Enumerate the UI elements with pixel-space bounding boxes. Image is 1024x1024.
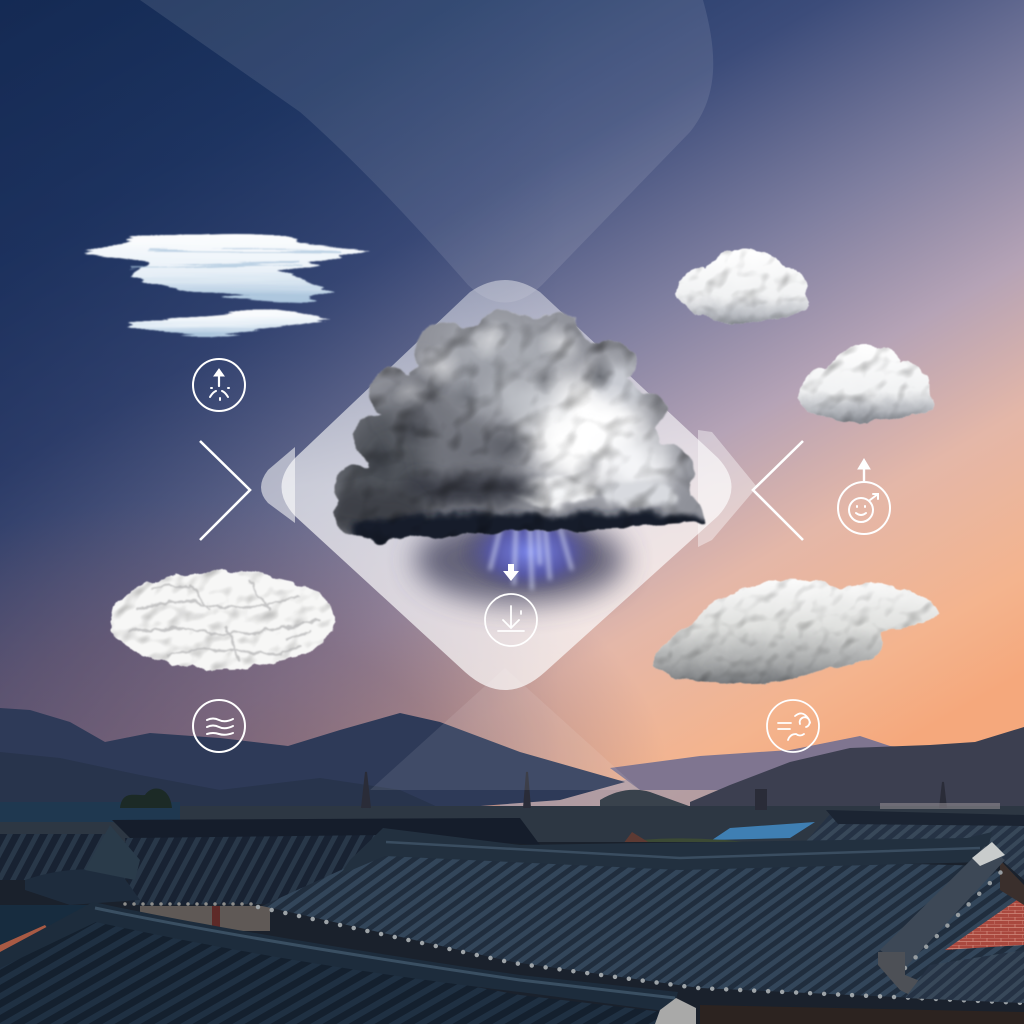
icon: rising arrow — [858, 459, 870, 481]
roof: rear centre — [112, 818, 540, 905]
icon: smiley circle — [838, 482, 890, 534]
icon: downdraft circle — [485, 594, 537, 646]
white cloud, upper right — [675, 248, 810, 325]
storm glow — [415, 510, 625, 604]
translucent top diamond shape — [140, 0, 713, 302]
right chevron — [753, 441, 803, 540]
large flat cloud, lower right — [652, 580, 940, 684]
roof: rear left — [0, 825, 270, 958]
icon: updraft circle — [193, 359, 245, 411]
roof: rear right — [800, 810, 1024, 880]
roof: gable at right — [878, 842, 1024, 1003]
icon: wind and swirl circle — [767, 700, 819, 752]
roof: front foreground — [0, 902, 1024, 1024]
icon: waves circle — [193, 700, 245, 752]
wispy cloud, upper left — [85, 231, 370, 336]
textured cloud, lower left — [109, 571, 335, 669]
storm cloud body — [332, 308, 706, 546]
town below the ridge line — [0, 772, 1024, 1024]
left chevron — [200, 441, 250, 540]
translucent bottom diamond shape — [370, 668, 640, 790]
central rounded diamond panel — [261, 280, 757, 690]
central storm cloud with lightning — [320, 300, 720, 604]
icon: downdraft arrow — [503, 564, 519, 581]
mountains and horizon — [0, 708, 1024, 815]
roof: main central — [258, 828, 1024, 1003]
white cloud, middle right — [797, 343, 935, 423]
